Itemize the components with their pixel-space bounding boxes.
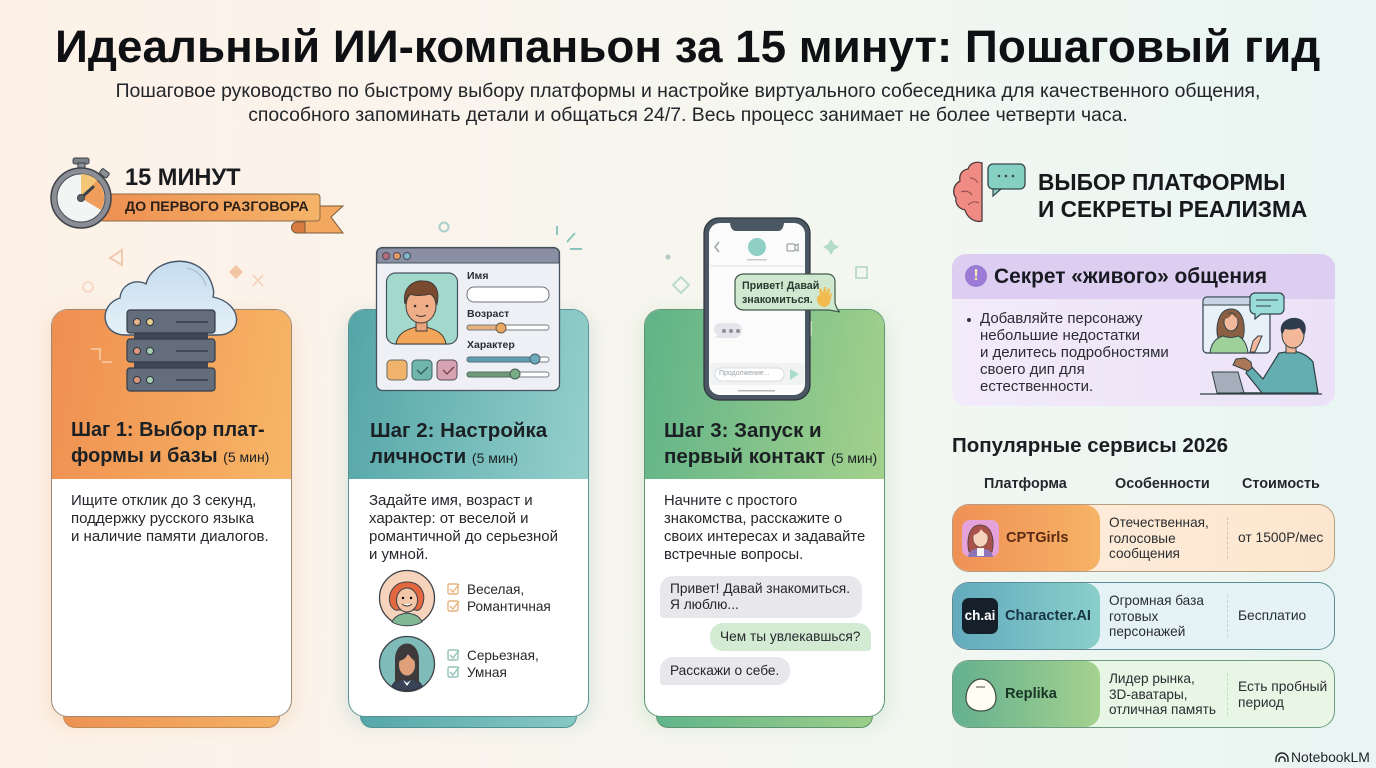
dashed separator — [1227, 517, 1228, 559]
step 3 text: знакомства, расскажите о — [664, 511, 842, 527]
traits: cheerful — [467, 582, 551, 614]
subtitle — [116, 80, 1260, 126]
ribbon text: ДО ПЕРВОГО РАЗГОВОРА — [125, 199, 309, 215]
chat: greeting: Привет! Давай знакомиться. — [670, 581, 850, 596]
step 2 card — [340, 246, 598, 732]
bullet dot — [967, 318, 971, 322]
avatar options — [378, 570, 460, 692]
step 1 text: поддержку русского языка — [71, 510, 254, 527]
features: Лидер рынка, — [1109, 671, 1195, 686]
icon: exclamation: ! — [973, 267, 979, 284]
platform name: Character.AI — [1005, 608, 1091, 624]
step 1 text — [71, 492, 269, 545]
panel heading: Секрет «живого» общения — [994, 265, 1267, 288]
chat: greeting — [660, 576, 862, 618]
watermark: NotebookLM — [1275, 749, 1370, 765]
step 3 heading — [664, 419, 877, 468]
chat: greeting: Я люблю... — [670, 597, 739, 612]
step 1 heading — [71, 419, 269, 466]
step 3 text — [664, 493, 865, 563]
platform logo — [962, 598, 998, 634]
step 2 text: и умной. — [369, 546, 428, 563]
subtitle: Пошаговое руководство по быстрому выбору платформы и настройке виртуального собеседника для качественного общения, — [116, 80, 1260, 102]
card base shadow — [63, 716, 280, 728]
platform cell — [953, 583, 1100, 649]
table header: cost: Стоимость — [1242, 476, 1320, 492]
card base shadow — [656, 716, 873, 728]
icon: exclamation — [965, 265, 987, 287]
right column heading — [1038, 169, 1307, 222]
price: от 1500Р/мес — [1238, 530, 1323, 545]
table header: features: Особенности — [1115, 476, 1210, 492]
traits: cheerful: Веселая, — [467, 582, 524, 597]
features — [1109, 671, 1216, 717]
step 2 heading: Шаг 2: Настройка — [370, 419, 547, 442]
table row: CPTGirls — [952, 504, 1335, 572]
chat: question — [710, 623, 871, 651]
deco strokes on card 1 — [91, 348, 112, 363]
heading: popular services: Популярные сервисы 2026 — [952, 434, 1228, 457]
deco strokes on card 3 — [810, 321, 812, 338]
bullet text: небольшие недостатки — [980, 327, 1140, 344]
price: Есть пробный — [1238, 679, 1327, 694]
step 1 text: Ищите отклик до 3 секунд, — [71, 492, 256, 509]
step 3 text: встречные вопросы. — [664, 547, 803, 563]
icon: cloud server — [104, 260, 238, 392]
step 2 text: романтичной до серьезной — [369, 528, 558, 545]
step 2 text: Задайте имя, возраст и — [369, 492, 533, 509]
traits: serious: Серьезная, — [467, 648, 539, 663]
platform logo: ch.ai — [965, 608, 995, 623]
price — [1238, 679, 1327, 710]
features: 3D-аватары, — [1109, 687, 1188, 702]
bullet text: своего дип для — [980, 361, 1085, 378]
bullet text: Добавляйте персонажу — [980, 310, 1142, 327]
icon: brain and chat bubble — [953, 162, 1026, 222]
platform name: CPTGirls — [1006, 530, 1068, 546]
step 1 heading: формы и базы (5 мин) — [71, 444, 269, 466]
features: сообщения — [1109, 546, 1180, 561]
traits: cheerful: Романтичная — [467, 599, 551, 614]
features: персонажей — [1109, 624, 1185, 639]
badge heading: 15 МИНУТ — [125, 165, 241, 191]
form label: character: Характер — [467, 339, 515, 351]
watermark text: NotebookLM — [1291, 749, 1370, 765]
step 1 text: и наличие памяти диалогов. — [71, 528, 269, 545]
form labels: Имя — [467, 270, 488, 282]
step 2 text — [369, 492, 558, 563]
table row: Character.AI — [952, 582, 1335, 650]
traits: serious — [467, 648, 539, 680]
table row: Replika — [952, 660, 1335, 728]
chat: ask about self — [660, 657, 790, 685]
chat: question: Чем ты увлекавшься? — [720, 629, 860, 644]
features: Огромная база — [1109, 593, 1204, 608]
subtitle: способного запоминать детали и общаться 24/7. Весь процесс занимает не более четверти часа. — [248, 104, 1128, 126]
card body — [348, 309, 589, 717]
card body — [51, 309, 292, 717]
step 3 heading: Шаг 3: Запуск и — [664, 419, 822, 442]
platform name: Replika — [1005, 686, 1057, 702]
step 3 text: Начните с простого — [664, 493, 797, 509]
price: период — [1238, 695, 1284, 710]
illustration: video chat — [1200, 292, 1322, 395]
dashed separator — [1227, 673, 1228, 715]
placeholder input text: Продолжение... — [719, 370, 770, 377]
price: Бесплатио — [1238, 608, 1306, 623]
title: Идеальный ИИ-компаньон за 15 минут: Пошаговый гид — [55, 21, 1320, 72]
features — [1109, 593, 1204, 639]
right column heading: И СЕКРЕТЫ РЕАЛИЗМА — [1038, 196, 1307, 222]
bullet text — [980, 310, 1169, 395]
step 2 heading — [370, 419, 548, 468]
icon: profile settings window — [376, 246, 560, 392]
badge: 15 minutes with stopwatch and ribbon — [50, 158, 344, 234]
features: готовых — [1109, 609, 1158, 624]
card body — [644, 309, 885, 717]
form label: age: Возраст — [467, 308, 509, 320]
features: Отечественная, — [1109, 515, 1209, 530]
step 3 text: своих интересах и задавайте — [664, 529, 865, 545]
step 1 card — [44, 260, 300, 730]
icon: NotebookLM logo — [1275, 752, 1289, 762]
step 3 heading: первый контакт (5 мин) — [664, 444, 877, 468]
traits: serious: Умная — [467, 665, 507, 680]
card base shadow — [360, 716, 577, 728]
platform logo — [962, 520, 999, 557]
decorative confetti around step cards — [82, 222, 868, 294]
step 1 heading: Шаг 1: Выбор плат- — [71, 419, 265, 441]
panel header band — [952, 254, 1335, 299]
platform logo — [965, 678, 997, 712]
step 3 card — [636, 217, 892, 730]
features — [1109, 515, 1209, 561]
bullet text: и делитесь подробностями — [980, 344, 1169, 361]
platform cell — [953, 505, 1100, 571]
step 2 heading: личности (5 мин) — [370, 444, 518, 468]
panel: secret of live communication — [952, 254, 1335, 406]
features: отличная память — [1109, 702, 1216, 717]
table header: platform: Платформа — [984, 476, 1067, 492]
dashed separator — [1227, 595, 1228, 637]
right column heading: ВЫБОР ПЛАТФОРМЫ — [1038, 169, 1285, 195]
icon: smartphone with chat — [703, 217, 840, 401]
chat: ask about self: Расскажи о себе. — [670, 663, 779, 678]
phone chat bubble text: Привет! Давай — [742, 280, 819, 292]
phone chat bubble text — [742, 280, 819, 306]
phone chat bubble text: знакомиться. — [742, 294, 813, 306]
platform cell — [953, 661, 1100, 727]
step 2 text: характер: от веселой и — [369, 510, 529, 527]
bullet text: естественности. — [980, 378, 1093, 395]
features: голосовые — [1109, 531, 1176, 546]
